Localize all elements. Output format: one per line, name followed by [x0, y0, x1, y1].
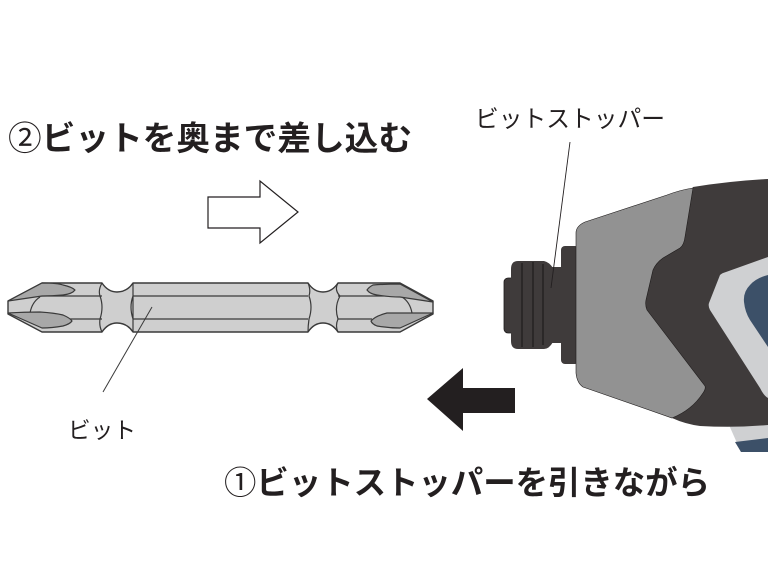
chuck grooves	[522, 262, 543, 347]
bit body	[8, 283, 433, 332]
heading: step 1: ①ビットストッパーを引きながら	[224, 464, 710, 501]
dark body	[630, 179, 768, 427]
leader line: bit	[103, 307, 152, 392]
leader line: bit stopper	[551, 142, 570, 288]
grey nose	[576, 188, 705, 418]
bit facet lines	[30, 283, 412, 332]
chuck sleeve	[511, 261, 553, 349]
icon: impact driver front	[504, 179, 768, 452]
blue panel	[744, 275, 768, 347]
left tip flutes	[8, 283, 75, 328]
label: bit: ビット	[68, 417, 136, 443]
right tip flutes	[367, 284, 433, 328]
neck	[540, 267, 564, 343]
light grey trim	[709, 257, 768, 398]
heading: step 2: ②ビットを奥まで差し込む	[8, 120, 412, 158]
arrow: insert direction (outline, right)	[208, 181, 298, 243]
arrow: pull direction (solid, left)	[427, 368, 515, 431]
bottom handle: light band	[729, 425, 768, 452]
label: bit stopper: ビットストッパー	[475, 106, 665, 133]
end cap	[504, 278, 516, 333]
collar	[561, 246, 579, 364]
icon: double-ended driver bit	[8, 283, 433, 332]
bottom handle: blue band	[735, 438, 768, 452]
